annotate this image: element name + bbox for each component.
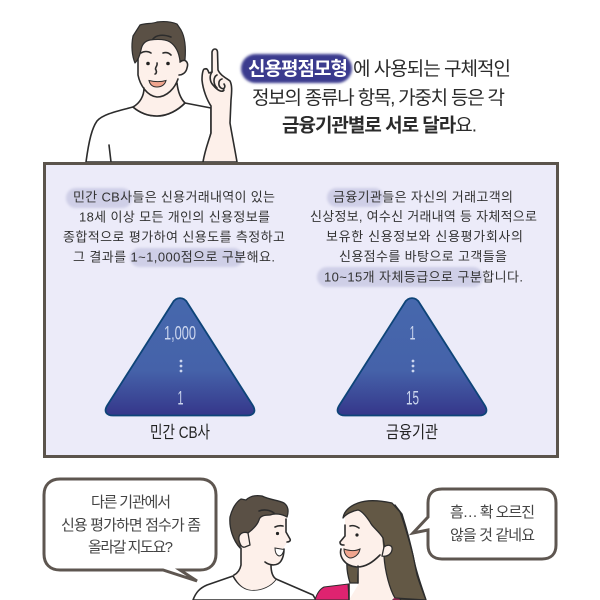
man shirt	[86, 103, 211, 162]
dots	[412, 360, 414, 372]
bottom man ear	[239, 532, 250, 547]
man shirt fold	[109, 145, 111, 162]
bubble text	[450, 503, 535, 544]
heading text: 에 사용되는 구체적인	[353, 58, 511, 80]
bottom man eye and brow	[275, 526, 283, 535]
description text: 민간 CB사들은 신용거래내역이 있는	[73, 190, 275, 204]
man neck and face	[133, 35, 188, 116]
bottom value: 1	[178, 388, 184, 410]
woman ear	[382, 545, 392, 556]
heading line 2: 정보의 종류나 항목, 가중치 등은 각	[252, 87, 505, 109]
description text	[63, 190, 285, 264]
bottom man hair	[230, 496, 288, 548]
bubble text: 흠… 확 오르진	[450, 503, 535, 521]
highlights	[66, 188, 243, 267]
woman mouth	[344, 549, 360, 558]
illustration: man pointing up	[86, 22, 237, 162]
illustration: man and woman	[193, 496, 426, 600]
label: 민간 CB사: 민간 CB사	[150, 423, 210, 442]
triangle shape	[338, 298, 486, 416]
speech bubble: man	[44, 479, 216, 581]
description text: 그 결과를 1~1,000점으로 구분해요.	[73, 250, 275, 264]
bottom man shirt	[193, 576, 316, 600]
bubble text	[61, 494, 201, 556]
left column: 민간 CB사 description	[63, 188, 285, 267]
description text: 신상정보, 여수신 거래내역 등 자체적으로	[310, 209, 537, 224]
heading text	[241, 54, 511, 136]
man face outline	[133, 57, 188, 116]
triangle: 금융기관 grade scale	[338, 298, 486, 416]
bubble text: 올라갈 지도요?	[88, 539, 173, 556]
description text: 18세 이상 모든 개인의 신용정보를	[79, 210, 270, 224]
woman face outline	[340, 525, 380, 600]
bottom value: 15	[406, 388, 419, 410]
bubble text: 않을 것 같네요	[450, 527, 535, 544]
bubble text: 신용 평가하면 점수가 좀	[61, 517, 201, 534]
man fingers	[210, 72, 225, 91]
panel: comparison	[44, 164, 558, 456]
triangle: 민간 CB사 score scale	[106, 298, 254, 416]
woman eye and brow	[350, 526, 359, 537]
label: 금융기관: 금융기관	[386, 423, 438, 442]
man hair highlight	[153, 35, 171, 39]
dots	[180, 360, 182, 372]
bubble text: 다른 기관에서	[91, 494, 171, 511]
top value: 1	[410, 324, 416, 344]
highlight pill: 신용평점모형	[241, 54, 352, 83]
bottom man hair highlight	[259, 510, 274, 513]
description text: 금융기관들은 자신의 거래고객의	[333, 190, 513, 204]
description text: 보유한 신용정보와 신용평가회사의	[326, 229, 523, 244]
bubble shape	[44, 479, 216, 581]
man arm and hand	[202, 49, 237, 162]
description text: 신용점수를 바탕으로 고객들을	[339, 249, 507, 264]
speech bubble: woman	[413, 489, 556, 559]
heading line 3: 금융기관별로 서로 달라요.	[282, 114, 477, 136]
description text: 10~15개 자체등급으로 구분합니다.	[324, 270, 523, 284]
man eyes	[146, 62, 170, 65]
heading line 1: 신용평점모형	[248, 58, 348, 80]
woman neck and face	[340, 510, 397, 600]
woman shirt	[315, 584, 401, 600]
bottom man neck and face	[234, 512, 290, 590]
man hair	[132, 22, 185, 63]
panel background	[44, 164, 558, 456]
highlights	[317, 188, 483, 287]
bubble shape	[413, 489, 556, 559]
man brows and nose	[141, 52, 171, 74]
description text: 종합적으로 평가하여 신용도를 측정하고	[63, 230, 285, 244]
woman front hair	[343, 501, 426, 600]
bottom man outline	[234, 519, 290, 579]
right column: 금융기관 description	[310, 188, 537, 287]
woman back hair	[347, 505, 426, 600]
man mouth	[149, 80, 166, 87]
description text	[310, 190, 537, 284]
triangle shape	[106, 298, 254, 416]
bottom man mouth	[275, 548, 284, 556]
top value: 1,000	[164, 324, 196, 344]
